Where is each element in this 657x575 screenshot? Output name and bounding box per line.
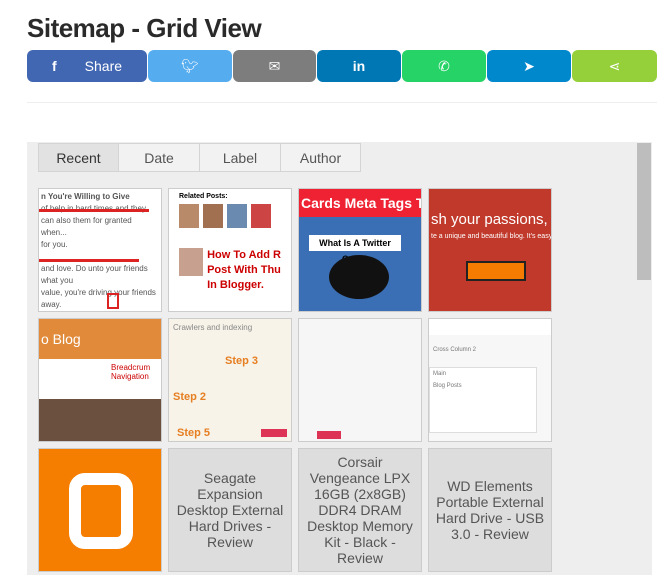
tile 7 (298, 318, 422, 442)
tile 8 (428, 318, 552, 442)
button: telegram: ➤ (523, 58, 535, 74)
grid panel (27, 142, 652, 575)
button: telegram (487, 50, 571, 82)
tab: recent: Recent (56, 150, 101, 166)
tile 12 (428, 448, 552, 572)
tab: author: Author (300, 150, 341, 166)
title: Sitemap - Grid View (27, 13, 261, 43)
tile 6: Step 2 (173, 391, 206, 403)
tile 8: Blog Posts (433, 383, 462, 389)
button: linkedin (317, 50, 401, 82)
tile 2: How To Add R (207, 249, 281, 261)
tile 9: blogger logo (38, 448, 162, 572)
tile 1: n You're Willing to Give (41, 192, 130, 201)
tile 4 (428, 188, 552, 312)
button: email (233, 50, 316, 82)
button: email: ✉ (269, 58, 280, 74)
tile 5: Breadcrum Navigation (111, 363, 150, 381)
button: facebook: f (52, 58, 57, 74)
button: linkedin: in (353, 58, 365, 74)
tile 2: Post With Thu (207, 264, 281, 276)
button: share: ⋖ (609, 58, 620, 74)
tab: recent (38, 143, 119, 172)
tile 2: Related Posts: (179, 193, 228, 200)
button: facebook: Share (85, 58, 122, 74)
tile 6 (168, 318, 292, 442)
tab: label (199, 143, 281, 172)
tabs (38, 143, 361, 172)
tile 6: Step 5 (177, 427, 210, 439)
tile 1: value, you're driving your friends away. (41, 288, 156, 309)
tile 8: Cross Column 2 (433, 347, 476, 353)
tab: date (118, 143, 200, 172)
tile 8: Main (433, 371, 446, 377)
tile 1: for you. (41, 240, 68, 249)
tile 5: o Blog (41, 331, 81, 347)
tile 3: What Is A Twitter Card? (319, 238, 391, 264)
tile 3 (298, 188, 422, 312)
tile 10 (168, 448, 292, 572)
button: twitter: 🐦︎ (181, 58, 199, 74)
tile 11: Corsair Vengeance LPX 16GB (2x8GB) DDR4 DRAM Desktop Memory Kit - Black - Review (307, 454, 413, 566)
tile 6: Crawlers and indexing (173, 323, 252, 332)
tile 2: In Blogger. (207, 279, 264, 291)
button: whatsapp: ✆ (438, 58, 450, 74)
button: twitter (148, 50, 232, 82)
tile 6: Step 3 (225, 355, 258, 367)
scrollbar (637, 143, 651, 280)
tile 2 (168, 188, 292, 312)
tile 1: of help in hard times and they can also them for granted when... (41, 204, 146, 237)
tab: date: Date (144, 150, 174, 166)
share buttons (27, 50, 657, 82)
tile 1: and love. Do unto your friends what you (41, 264, 148, 285)
tile 12: WD Elements Portable External Hard Drive - USB 3.0 - Review (436, 478, 544, 542)
tab: author (280, 143, 361, 172)
tile 1 (38, 188, 162, 312)
button: whatsapp (402, 50, 486, 82)
button: facebook (27, 50, 147, 82)
tile 5 (38, 318, 162, 442)
tile 10: Seagate Expansion Desktop External Hard Drives - Review (177, 470, 283, 550)
button: share (572, 50, 657, 82)
tab: label: Label (223, 150, 257, 166)
